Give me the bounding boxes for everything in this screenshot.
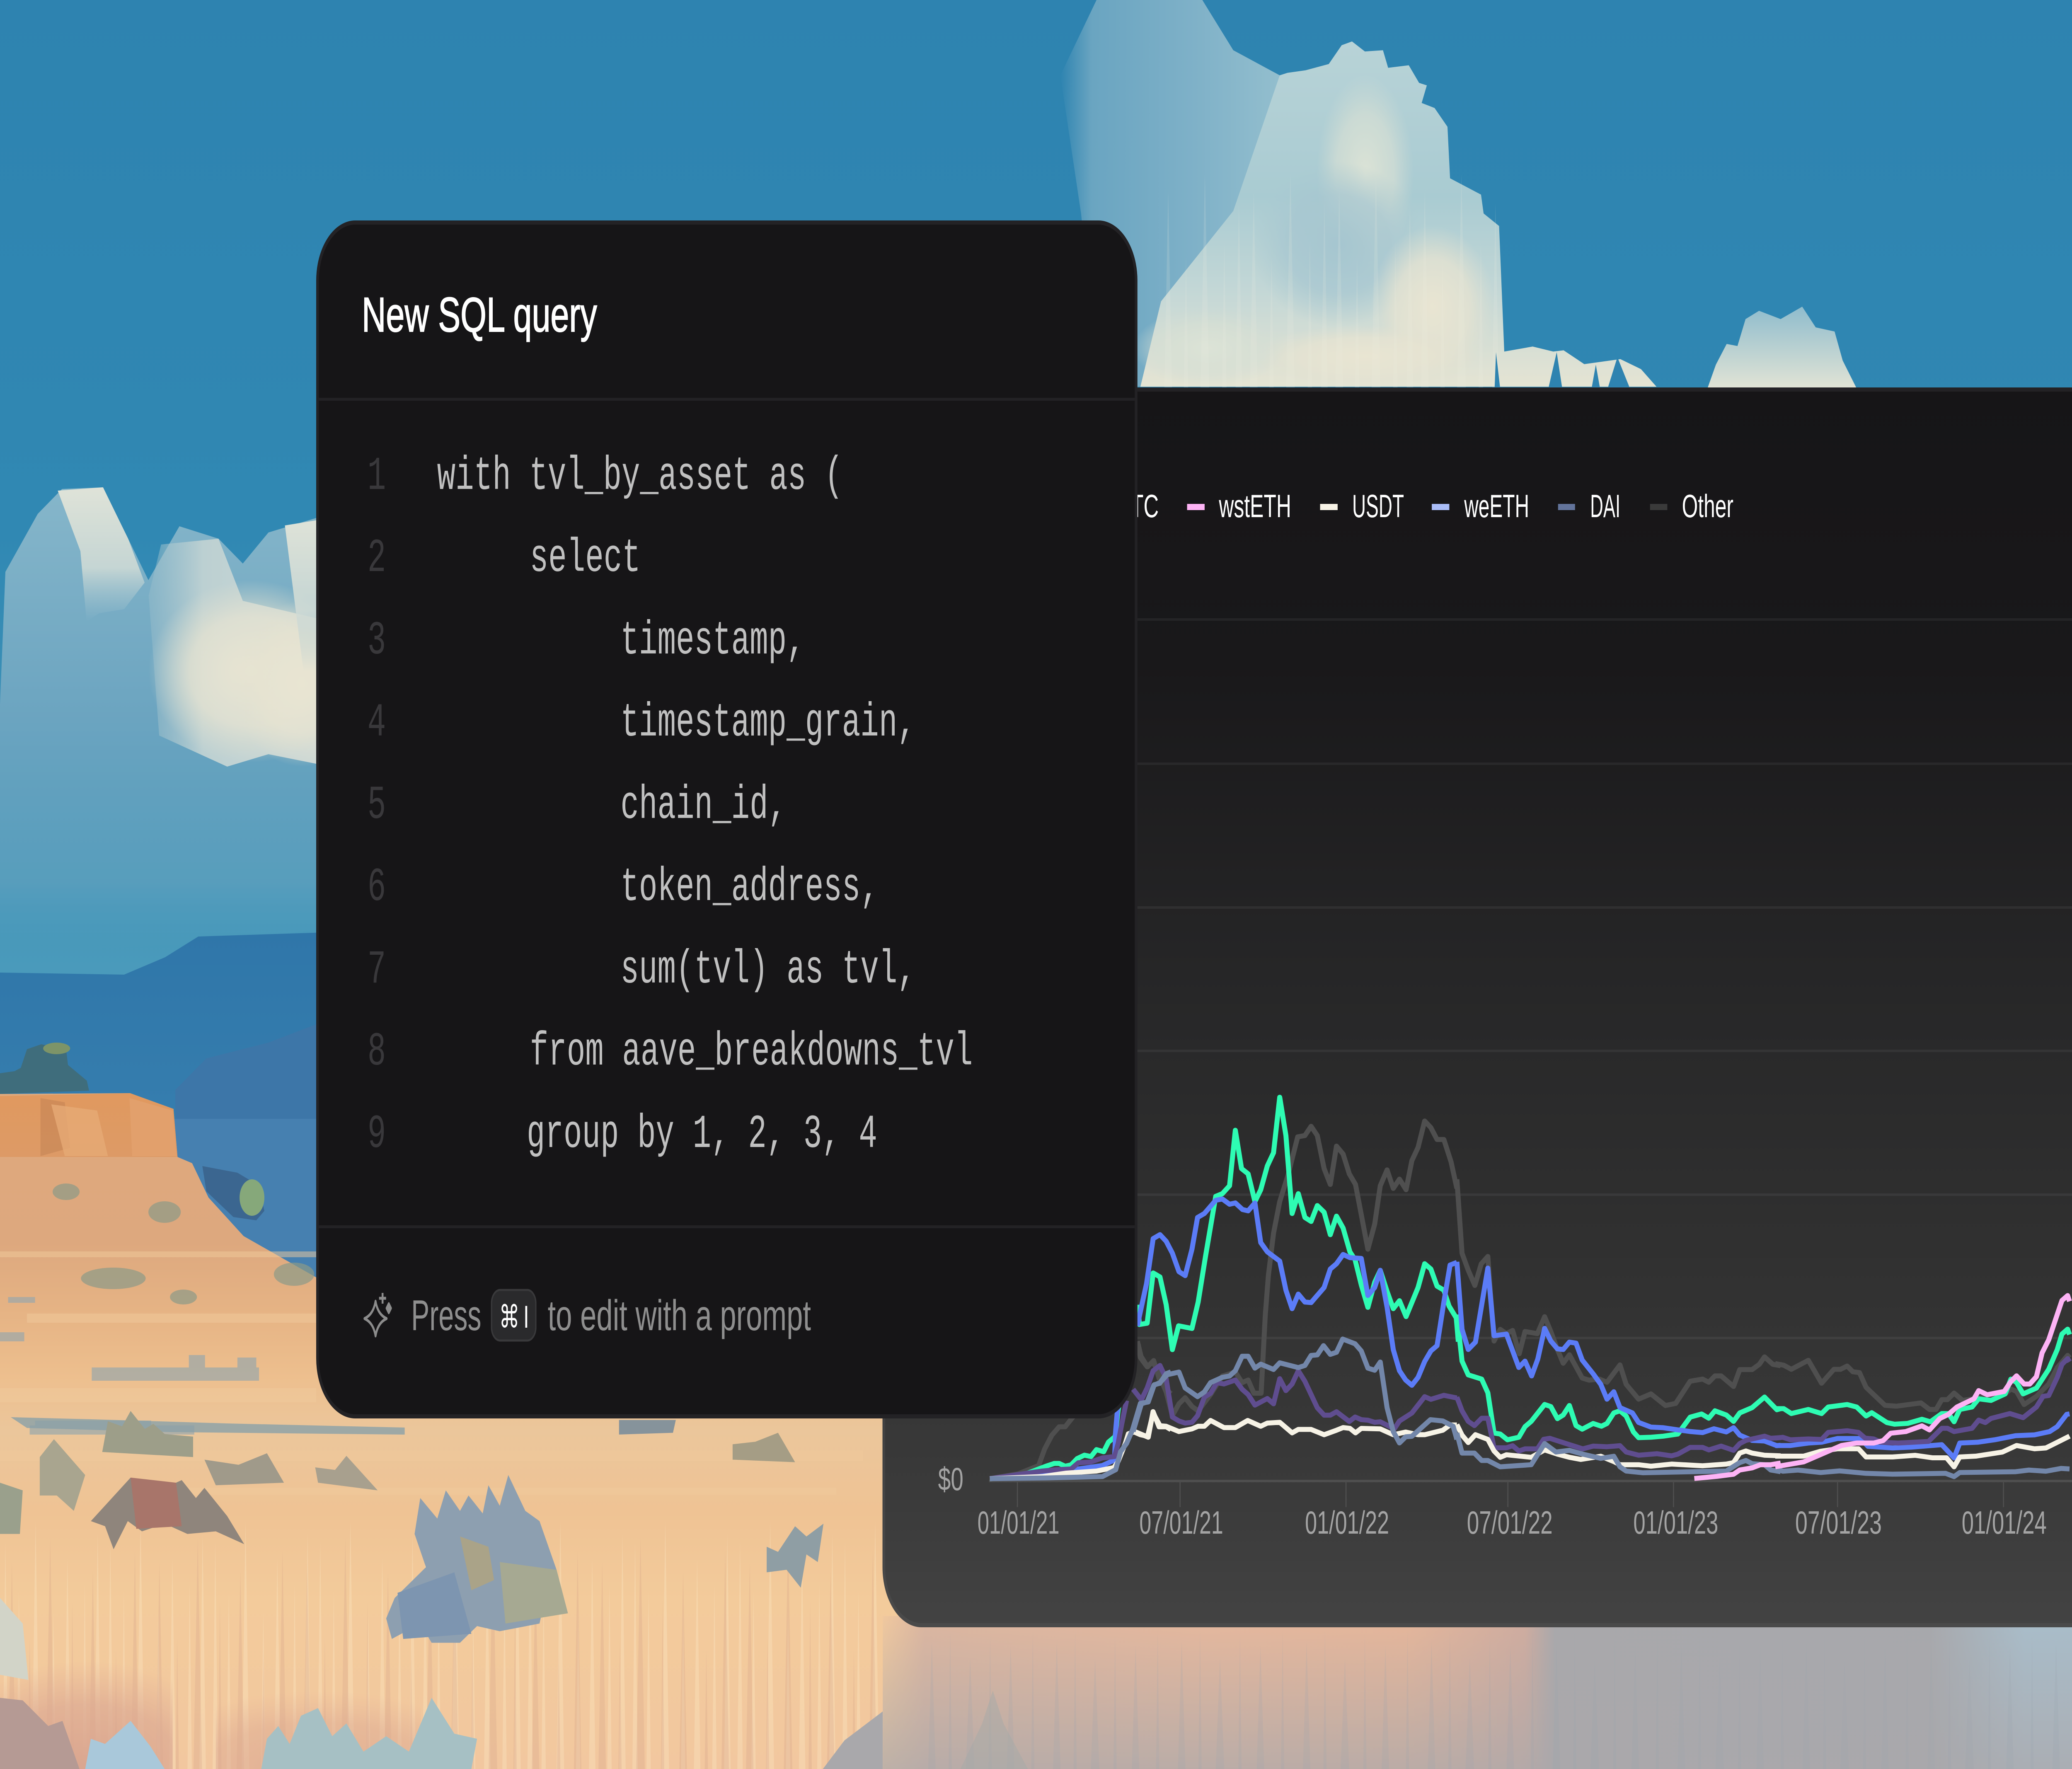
SQL code: select bbox=[530, 532, 641, 585]
mesa rock detail bbox=[41, 1098, 70, 1156]
mesa cliff face bbox=[0, 1093, 177, 1157]
keyboard shortcut: ⌘ bbox=[499, 1299, 520, 1336]
x axis labels: 07/01/21 bbox=[1139, 1504, 1223, 1541]
SQL code: from aave_breakdowns_tvl bbox=[530, 1025, 973, 1079]
legend item: wstETH: wstETH bbox=[1219, 488, 1291, 524]
SQL code: with tvl_by_asset as ( bbox=[437, 450, 843, 503]
legend item: weETH: weETH bbox=[1464, 488, 1529, 524]
text: to edit with a prompt: to edit with a prompt bbox=[548, 1291, 811, 1340]
right slope shrub shadow bbox=[202, 1166, 264, 1220]
SQL code: token_address, bbox=[620, 861, 879, 914]
series: blue bbox=[990, 1199, 2070, 1479]
bottom strip brush streaks bbox=[923, 1629, 2072, 1769]
footer prompt hint bbox=[365, 1290, 811, 1341]
SQL code bbox=[437, 450, 973, 1161]
valley haze bbox=[173, 1119, 351, 1301]
series: wstETH bbox=[1694, 1296, 2070, 1479]
x axis labels: 01/01/23 bbox=[1633, 1504, 1718, 1541]
slope rocks and ground bands bbox=[0, 1183, 863, 1495]
panel: chart card bbox=[883, 387, 2072, 1627]
series: green bbox=[990, 1097, 2070, 1479]
line numbers: 2 bbox=[368, 532, 386, 585]
line numbers: 6 bbox=[368, 861, 386, 914]
legend item: WBTC: WBTC bbox=[1097, 488, 1159, 524]
icon: sparkle bbox=[365, 1293, 391, 1336]
line numbers: 9 bbox=[368, 1108, 386, 1161]
mesa lit face bbox=[51, 1104, 108, 1156]
line numbers: 5 bbox=[368, 779, 386, 832]
plains ground bbox=[0, 1093, 2072, 1769]
SQL code: timestamp_grain, bbox=[620, 696, 916, 750]
line numbers: 8 bbox=[368, 1025, 386, 1079]
right slope green shrub bbox=[240, 1179, 264, 1216]
legend item: USDT bbox=[1320, 488, 1404, 524]
bottom strip grey fade bbox=[883, 1616, 2072, 1769]
series: Other bbox=[990, 1121, 2070, 1479]
SQL code: timestamp, bbox=[620, 614, 805, 668]
card background bbox=[317, 223, 1136, 1416]
x axis labels: 07/01/23 bbox=[1795, 1504, 1882, 1541]
legend bbox=[1097, 488, 1733, 524]
legend item: wstETH bbox=[1187, 488, 1291, 524]
x axis labels: 07/01/22 bbox=[1467, 1504, 1553, 1541]
keyboard shortcut: I bbox=[523, 1299, 529, 1335]
SQL code: sum(tvl) as tvl, bbox=[620, 943, 916, 997]
line numbers: 3 bbox=[368, 614, 386, 668]
panel: SQL query card bbox=[317, 223, 1136, 1416]
bottom edge dark bush bbox=[961, 1691, 1028, 1769]
upper right cloud bbox=[1060, 0, 1656, 387]
legend item: weETH bbox=[1432, 488, 1529, 524]
near blue ridge bbox=[175, 1011, 351, 1301]
x axis labels: 01/01/21 bbox=[978, 1504, 1060, 1541]
shrub highlights bbox=[43, 1043, 70, 1054]
grass texture bbox=[0, 1512, 883, 1769]
line chart bbox=[990, 1097, 2070, 1479]
distant mountains bbox=[0, 932, 351, 1301]
legend item: Other: Other bbox=[1682, 488, 1733, 524]
mesa top shrubs bbox=[0, 1044, 89, 1094]
line numbers: 1 bbox=[368, 450, 386, 503]
grass texture dark bbox=[0, 1512, 883, 1769]
line numbers: 4 bbox=[368, 696, 386, 750]
legend item: DAI bbox=[1558, 488, 1620, 524]
legend item: USDT: USDT bbox=[1352, 488, 1404, 524]
series: purple bbox=[990, 1359, 2070, 1479]
keyboard shortcut bbox=[491, 1290, 536, 1341]
x axis labels: 01/01/22 bbox=[1305, 1504, 1389, 1541]
mesa right buttress bbox=[129, 1098, 177, 1156]
left cloud bbox=[0, 487, 372, 953]
chart background bbox=[885, 392, 2072, 1623]
text: Press: Press bbox=[411, 1291, 481, 1340]
x axis labels bbox=[978, 1504, 2047, 1541]
bushes bbox=[0, 1411, 823, 1769]
series: DAI bbox=[990, 1339, 2070, 1479]
line numbers bbox=[368, 450, 386, 1161]
title: New SQL query bbox=[362, 288, 597, 342]
SQL code: group by 1, 2, 3, 4 bbox=[527, 1108, 877, 1161]
legend item: Other bbox=[1650, 488, 1733, 524]
x axis labels: 01/01/24 bbox=[1962, 1504, 2047, 1541]
line numbers: 7 bbox=[368, 943, 386, 997]
small far right cloud bbox=[1708, 307, 1856, 387]
bottom strip under chart bbox=[883, 1616, 2072, 1769]
bottom centre haze bbox=[216, 1682, 421, 1769]
y axis label: $0 bbox=[938, 1461, 963, 1497]
series: USDT bbox=[990, 1412, 2070, 1479]
legend item: DAI: DAI bbox=[1590, 488, 1620, 524]
SQL code: chain_id, bbox=[620, 779, 787, 832]
chart border bbox=[883, 387, 2072, 1627]
bottom left pink haze bbox=[0, 1649, 173, 1769]
bottom right corner grey grass bbox=[823, 1711, 883, 1769]
